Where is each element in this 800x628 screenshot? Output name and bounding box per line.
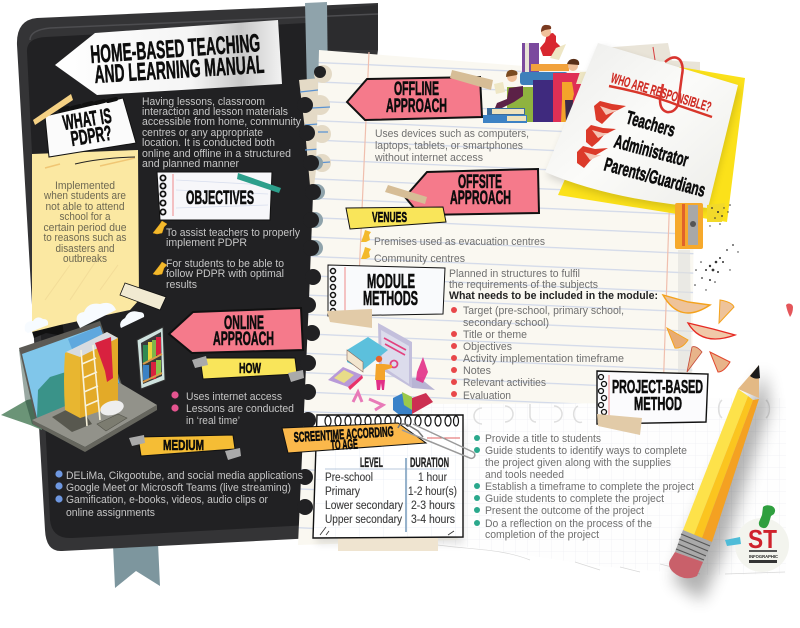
card: screentime table: DURATION: [410, 454, 449, 470]
sticky note: who are responsible: WHO ARE RESPONSIBLE?: [609, 70, 713, 115]
venues tape: [346, 207, 446, 229]
offsite approach tag: APPROACH: [450, 188, 511, 209]
sticky note: who are responsible: [545, 43, 745, 222]
module list: Notes: [463, 365, 491, 377]
notebook cover: [17, 3, 378, 551]
yellow note: implemented when: school for a: [60, 211, 111, 223]
objectives list: To assist teachers to properly: [166, 227, 300, 239]
card: screentime table: [313, 415, 464, 551]
how list: Uses internet access: [186, 391, 282, 403]
illustration: people on books: [483, 25, 590, 123]
module list: Activity implementation timeframe: [463, 353, 624, 365]
elastic band: [305, 2, 328, 90]
offline text: Uses devices such as computers,: [375, 128, 529, 140]
how list: Lessons are conducted: [186, 403, 294, 415]
illustration: laptop with books: [1, 320, 165, 452]
venues list: Community centres: [374, 253, 465, 265]
badge: ST infographic: [725, 505, 789, 572]
card: screentime table: LEVEL: [360, 454, 383, 470]
icon: paperclip: [660, 57, 683, 112]
intro text: [142, 96, 301, 170]
medium list: online assignments: [66, 507, 155, 519]
module text: the requirements of the subjects: [449, 279, 598, 291]
card: module methods: [327, 265, 445, 328]
medium list: DELiMa, Cikgootube, and social media applications: [66, 470, 303, 482]
medium tape: [129, 435, 241, 460]
intro text: and planned manner: [142, 158, 239, 170]
venues list: Premises used as evacuation centres: [374, 236, 545, 248]
card: project-based method: METHOD: [634, 394, 682, 414]
icon: safety pin: [398, 424, 475, 458]
objectives list: results: [166, 279, 197, 291]
card: screentime table: 1-2 hour(s): [408, 486, 457, 498]
offsite approach tag: OFFSITE: [458, 172, 502, 193]
banner: screentime according to age: [282, 423, 475, 458]
offline text: without internet access: [374, 152, 483, 164]
online approach tag: [169, 308, 303, 353]
card: screentime table: Upper secondary: [325, 514, 402, 526]
intro text: location. It is conducted both: [142, 137, 275, 149]
offsite approach tag: [385, 169, 539, 215]
offline approach tag: APPROACH: [386, 96, 447, 117]
graphite specks: [694, 203, 739, 291]
yellow note: implemented when: outbreaks: [63, 253, 107, 265]
yellow note: implemented when: disasters and: [56, 243, 114, 255]
module list: Relevant activities: [463, 377, 546, 389]
beige back sheet: [299, 78, 320, 197]
icon: clouds: [25, 303, 144, 333]
card: screentime table: Primary: [325, 486, 360, 498]
project list: Guide students to identify ways to complete: [485, 445, 687, 457]
badge: ST infographic: INFOGRAPHIC: [749, 554, 779, 559]
medium list: Gamification, e-books, videos, audio clips or: [66, 494, 268, 506]
lined paper sheet: [298, 50, 695, 545]
yellow note: implemented when: not able to attend: [46, 201, 124, 213]
icon: pencil shavings: [663, 295, 735, 372]
module list: [451, 305, 624, 402]
sticky note: who are responsible: Parents/Guardians: [602, 155, 708, 202]
card: what is PDPR: WHAT IS: [61, 105, 113, 135]
card: screentime table: 3-4 hours: [411, 514, 455, 526]
sticky note: who are responsible: Teachers: [624, 108, 677, 142]
intro text: interaction and lesson materials: [142, 106, 288, 118]
online approach tag: APPROACH: [213, 329, 274, 350]
beige tabs: [310, 65, 332, 172]
yellow note: implemented when: certain period due: [44, 222, 126, 234]
module text: [449, 268, 658, 302]
module list: Target (pre-school, primary school,: [463, 305, 624, 317]
icon: check marks: [577, 101, 626, 168]
card: objectives: OBJECTIVES: [186, 188, 254, 209]
project list: completion of the project: [485, 529, 599, 541]
card: module methods: MODULE: [367, 271, 415, 293]
medium list: [55, 470, 303, 519]
offline approach tag: OFFLINE: [394, 79, 439, 100]
intro text: centres or any appropriate: [142, 127, 263, 139]
card: what is PDPR: [33, 94, 136, 157]
medium list: Google Meet or Microsoft Teams (live streaming): [66, 482, 291, 494]
venues tape: VENUES: [372, 209, 407, 226]
intro text: online and offline in a structured: [142, 148, 291, 160]
objectives list: follow PDPR with optimal: [166, 268, 284, 280]
offline text: [374, 128, 529, 164]
offline approach tag: [347, 70, 493, 120]
how list: in ‘real time’: [186, 415, 240, 427]
how list: [171, 391, 294, 427]
card: screentime table: 1 hour: [418, 472, 447, 484]
tape above clouds: [120, 283, 166, 310]
card: screentime table: Pre-school: [325, 472, 373, 484]
project list: Provide a title to students: [485, 433, 601, 445]
icon: pin: [361, 230, 371, 242]
project list: Establish a timeframe to complete the project: [485, 481, 694, 493]
project list: and tools needed: [485, 469, 564, 481]
objectives list: For students to be able to: [166, 258, 284, 270]
illustration: pencil: [669, 365, 770, 601]
illustration: module learning: [328, 323, 435, 417]
module text: What needs to be included in the module:: [449, 290, 658, 302]
module list: Title or theme: [463, 329, 527, 341]
how tape: [192, 356, 304, 382]
project list: Guide students to complete the project: [485, 493, 664, 505]
icon: red drop: [786, 304, 793, 317]
sticky note: who are responsible: Administrator: [612, 132, 691, 172]
yellow note: implemented when: to reasons such as: [44, 232, 127, 244]
card: screentime table: Lower secondary: [325, 500, 403, 512]
project list: the project given along with the supplies: [485, 457, 671, 469]
project list: Do a reflection on the process of the: [485, 518, 652, 530]
module list: Evaluation: [463, 390, 511, 402]
background grid sheet: [420, 398, 786, 575]
card: project-based method: [597, 371, 708, 435]
icon: pin: [361, 247, 371, 259]
objectives list: [153, 221, 300, 291]
medium tape: MEDIUM: [163, 437, 204, 454]
card: objectives: [157, 172, 281, 220]
venues list: [361, 230, 545, 265]
offline text: laptops, tablets, or smartphones: [375, 140, 523, 152]
title arrow: AND LEARNING MANUAL: [94, 51, 265, 89]
title text: HOME-BASED TEACHING: [89, 29, 261, 69]
icon: pin: [153, 262, 167, 275]
bookmark ribbon: [113, 543, 160, 588]
card: project-based method: PROJECT-BASED: [612, 377, 703, 397]
card: module methods: METHODS: [363, 288, 418, 310]
icon: sharpener: [675, 203, 703, 249]
title arrow: [55, 20, 282, 95]
module list: Objectives: [463, 341, 512, 353]
banner: screentime according to age: SCREENTIME ACCORDING: [293, 423, 394, 445]
banner: screentime according to age: TO AGE: [330, 436, 358, 453]
icon: pin: [153, 221, 167, 234]
yellow note: implemented when: Implemented: [55, 180, 115, 192]
notebook holes: [297, 66, 326, 515]
intro text: Having lessons, classroom: [142, 96, 265, 108]
card: what is PDPR: PDPR?: [69, 122, 113, 151]
icon: green pin: [759, 505, 775, 528]
online approach tag: ONLINE: [224, 313, 264, 334]
module text: Planned in structures to fulfil: [449, 268, 580, 280]
module list: secondary school): [463, 317, 549, 329]
how tape: HOW: [239, 360, 261, 377]
badge: ST infographic: ST: [748, 524, 777, 554]
project list: Present the outcome of the project: [485, 505, 644, 517]
yellow note: implemented when: when students are: [43, 190, 126, 202]
project list: [474, 433, 694, 541]
objectives list: implement PDPR: [166, 237, 247, 249]
intro text: accessible from home, community: [142, 116, 301, 128]
card: screentime table: 2-3 hours: [411, 500, 455, 512]
yellow note: implemented when: [30, 150, 139, 338]
